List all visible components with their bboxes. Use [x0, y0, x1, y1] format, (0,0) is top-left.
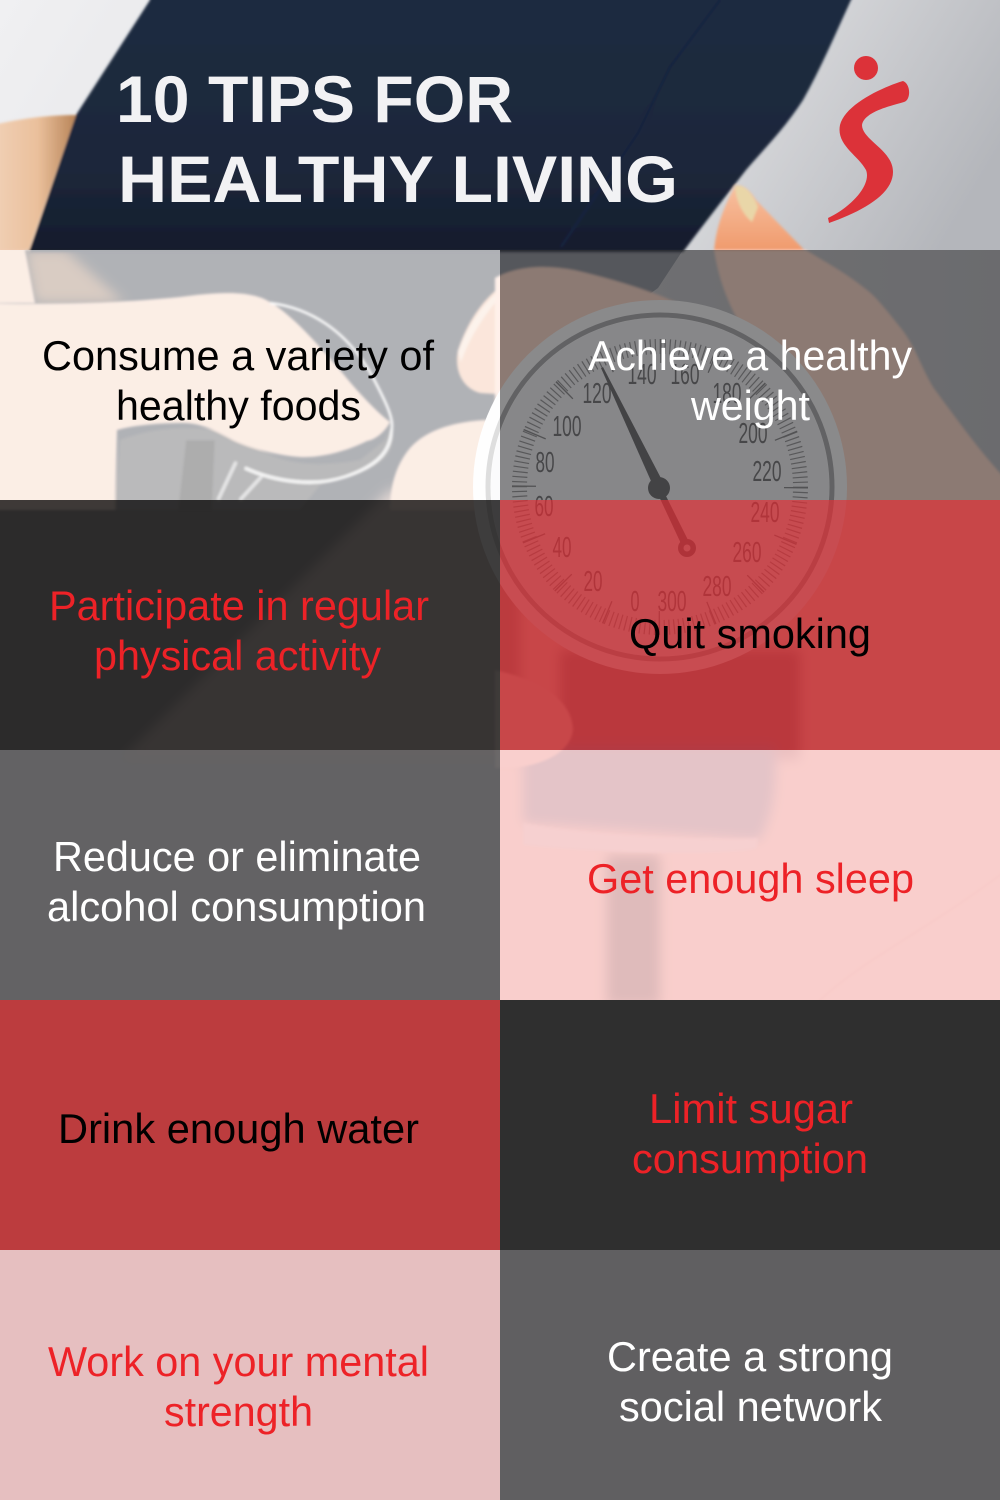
- panel: healthy weight: weight: [690, 382, 810, 429]
- panel: healthy weight: Achieve a healthy: [588, 332, 912, 379]
- panel: mental strength: Work on your mental: [48, 1338, 429, 1385]
- gauge dial numbers: 40: [552, 532, 572, 564]
- panel: consume healthy foods: Consume a variety of: [42, 332, 434, 379]
- gauge dial numbers: 60: [534, 491, 554, 523]
- gauge dial numbers: 300: [658, 586, 686, 618]
- panel: limit sugar: [500, 1000, 1000, 1250]
- gauge dial numbers: [534, 359, 782, 618]
- gauge dial numbers: 200: [738, 418, 768, 450]
- panel: reduce alcohol: [0, 750, 500, 1000]
- panel: quit smoking: [500, 500, 1000, 750]
- panel: enough sleep: Get enough sleep: [587, 855, 914, 902]
- gauge dial numbers: 160: [670, 359, 700, 391]
- panel: reduce alcohol: Reduce or eliminate: [53, 833, 421, 880]
- panel: drink water: Drink enough water: [58, 1105, 419, 1152]
- panel: social network: [500, 1250, 1000, 1500]
- panel: healthy weight: [500, 250, 1000, 500]
- panel: physical activity: Participate in regular: [49, 582, 429, 629]
- gauge dial numbers: 260: [732, 537, 762, 569]
- panel: social network: Create a strong: [607, 1333, 893, 1380]
- title: [116, 62, 678, 216]
- panel: drink water: [0, 1000, 500, 1250]
- gauge dial numbers: 20: [584, 566, 602, 598]
- background photo: blood pressure cuff and gauge: [0, 0, 1000, 1005]
- gauge dial numbers: 120: [582, 378, 612, 410]
- gauge dial numbers: 220: [752, 456, 782, 488]
- panel: enough sleep: [500, 750, 1000, 1000]
- panel: mental strength: [0, 1250, 500, 1500]
- panel: mental strength: strength: [164, 1388, 313, 1435]
- panel: physical activity: [0, 500, 500, 750]
- gauge dial numbers: 100: [552, 411, 582, 443]
- gauge dial numbers: 80: [536, 447, 554, 479]
- gauge dial numbers: 280: [702, 571, 732, 603]
- gauge dial numbers: 140: [628, 359, 656, 391]
- panel: limit sugar: consumption: [632, 1135, 868, 1182]
- gauge dial numbers: 0: [630, 586, 640, 618]
- panel: limit sugar: Limit sugar: [649, 1085, 853, 1132]
- title: HEALTHY LIVING: [118, 142, 678, 216]
- panel: social network: social network: [619, 1383, 882, 1430]
- panel: quit smoking: Quit smoking: [629, 610, 871, 657]
- gauge dial numbers: 180: [712, 378, 742, 410]
- panel: consume healthy foods: [0, 250, 500, 500]
- gauge dial numbers: 240: [750, 497, 780, 529]
- gauge needle: [601, 367, 696, 557]
- panel: reduce alcohol: alcohol consumption: [47, 883, 426, 930]
- title: 10 TIPS FOR: [116, 62, 513, 136]
- panel: physical activity: physical activity: [94, 632, 381, 679]
- panel: consume healthy foods: healthy foods: [116, 382, 361, 429]
- icon: red figure logo: [828, 56, 909, 223]
